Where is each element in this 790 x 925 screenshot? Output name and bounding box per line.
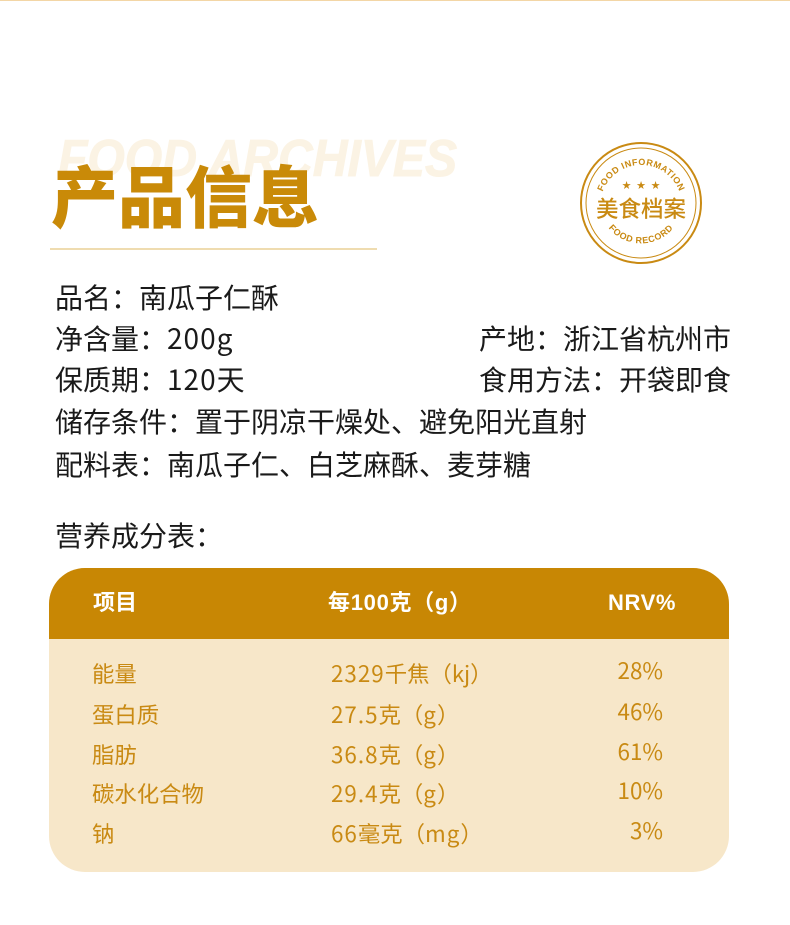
stamp: food information: 美食档案 — [596, 192, 686, 224]
stamp: food information — [580, 142, 702, 264]
row: carbohydrate: 碳水化合物 — [92, 777, 204, 809]
row: sodium: 66毫克（mg） — [331, 817, 483, 849]
usage: 食用方法：开袋即食 — [479, 359, 731, 399]
row: sodium — [92, 814, 663, 849]
row: protein: 46% — [618, 695, 663, 727]
product name: 品名：南瓜子仁酥 — [55, 277, 279, 317]
row: protein: 27.5克（g） — [331, 698, 459, 730]
stamp: food information: FOOD INFORMATION — [597, 158, 685, 192]
row: fat: 脂肪 — [92, 738, 137, 770]
stamp: food information: ★ — [651, 179, 661, 192]
origin: 产地：浙江省杭州市 — [479, 318, 731, 358]
row: protein — [92, 695, 663, 730]
table header — [49, 568, 729, 639]
nutrition table — [49, 568, 729, 872]
title: 产品信息 — [51, 145, 319, 242]
ingredients: 配料表：南瓜子仁、白芝麻酥、麦芽糖 — [55, 444, 531, 484]
stamp: food information: ★ — [636, 179, 646, 192]
row: fat: 61% — [618, 735, 663, 767]
net weight: 净含量：200g — [55, 318, 233, 358]
stamp: food information: ★ — [622, 179, 632, 192]
header: item: 项目 — [93, 590, 137, 615]
row: fat — [92, 735, 663, 770]
row: sodium: 3% — [630, 814, 663, 846]
stamp: food information: FOOD RECORD — [608, 224, 672, 244]
header: per 100g: 每100克（g） — [328, 590, 472, 615]
row: fat: 36.8克（g） — [331, 738, 459, 770]
storage: 储存条件：置于阴凉干燥处、避免阳光直射 — [55, 401, 587, 441]
row: protein: 蛋白质 — [92, 698, 159, 730]
row: carbohydrate — [92, 774, 663, 809]
top border line — [0, 0, 790, 1]
row: carbohydrate: 10% — [618, 774, 663, 806]
row: energy: 能量 — [92, 657, 137, 689]
row: energy: 28% — [618, 654, 663, 686]
row: energy — [92, 654, 663, 689]
shelf life: 保质期：120天 — [55, 359, 245, 399]
product details text block — [55, 277, 731, 484]
background watermark: FOOD ARCHIVES: FOOD ARCHIVES — [58, 130, 457, 188]
row: carbohydrate: 29.4克（g） — [331, 777, 459, 809]
title underline — [50, 248, 377, 250]
nutrition heading: 营养成分表： — [55, 515, 223, 555]
header: NRV: NRV% — [608, 590, 676, 615]
row: sodium: 钠 — [92, 817, 114, 849]
row: energy: 2329千焦（kj） — [331, 657, 493, 689]
